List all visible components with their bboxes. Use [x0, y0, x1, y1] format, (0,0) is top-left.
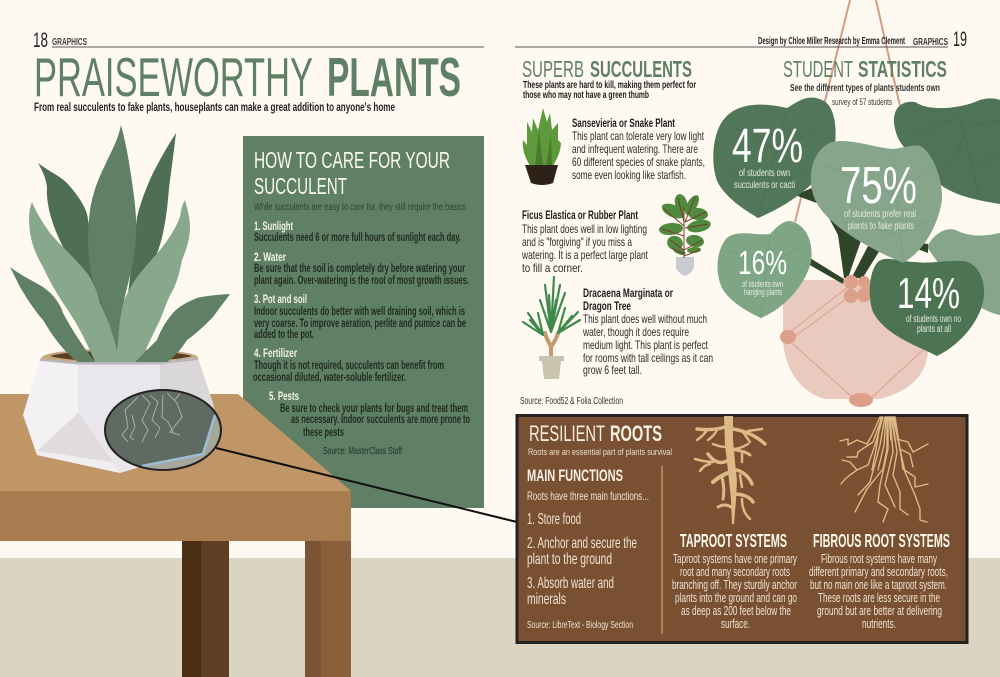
table — [0, 394, 351, 677]
leaf: 75 percent — [811, 141, 942, 263]
care tips: plant again. Over-watering is the root of most growth issues. — [254, 275, 469, 287]
text: dragon tree: medium light. This plant is perfect — [583, 338, 708, 352]
taproot systems: TAPROOT SYSTEMS — [680, 531, 787, 551]
left page header — [33, 29, 484, 52]
care tips: Be sure to check your plants for bugs and treat them — [280, 403, 468, 415]
right page header: Design by Chloe Miller Research by Emma Clement — [758, 36, 905, 47]
subtitle: From real succulents to fake plants, houseplants can make a great addition to anyone's home — [34, 102, 395, 114]
care tips: Though it is not required, succulents can benefit from — [254, 360, 444, 372]
leaf: 16 percent: of students own — [742, 279, 783, 289]
main functions — [527, 467, 649, 631]
succulents intro: These plants are hard to kill, making them perfect for — [523, 79, 696, 91]
main functions: minerals — [527, 591, 566, 608]
fibrous root systems: Fibrous root systems have many — [821, 552, 937, 566]
stems — [795, 188, 928, 284]
care tips: occasional diluted, water-soluble fertilizer. — [253, 372, 406, 384]
icon: dragon tree — [523, 277, 580, 379]
panel: how to care — [243, 136, 484, 508]
heading: student statistics: STUDENT — [783, 56, 853, 82]
right page hanging ropes — [795, 0, 902, 222]
text: snake plant: 60 different species of snake plants, — [572, 155, 705, 169]
text: dragon tree — [582, 288, 713, 377]
leaf: 47 percent: succulents or cacti — [734, 179, 795, 191]
care tips: 2. Water — [254, 252, 286, 264]
panel source: Source: MasterClass Staff — [323, 446, 402, 457]
main functions: plant to the ground — [527, 551, 612, 568]
taproot systems: branching off. They sturdily anchor — [672, 578, 797, 592]
icon: rubber plant — [659, 193, 712, 276]
heading: student statistics: STATISTICS — [858, 56, 947, 82]
text: dragon tree: This plant does well without much — [583, 312, 707, 326]
leaf: 16 percent — [717, 221, 812, 318]
care tips: 5. Pests — [269, 391, 299, 403]
text: dragon tree: water, though it does require — [582, 325, 689, 339]
care tips — [253, 221, 470, 439]
leaf: 75 percent: 75% — [840, 157, 917, 215]
text: snake plant: some even looking like starfish. — [572, 168, 686, 182]
left page header: GRAPHICS — [52, 37, 87, 48]
text: dragon tree: Dragon Tree — [583, 301, 631, 313]
roots heading: RESILIENT — [529, 421, 605, 446]
text: dragon tree: for rooms with tall ceilings as it can — [583, 351, 713, 365]
taproot systems: Taproot systems have one primary — [673, 552, 797, 566]
main functions: Roots have three main functions... — [527, 489, 649, 503]
roots heading: ROOTS — [610, 421, 662, 446]
heading: student statistics — [783, 56, 947, 82]
right page header — [515, 28, 967, 51]
heading: superb succulents: SUCCULENTS — [590, 56, 692, 82]
care tips: 4. Fertilizer — [254, 348, 297, 360]
leaf: 47 percent — [713, 97, 836, 218]
hanging plant illustration — [713, 97, 1000, 407]
taproot systems: as deep as 200 feet below the — [681, 604, 791, 618]
illustration: pot — [23, 349, 218, 473]
pot strings and knots — [780, 275, 923, 407]
heading: superb succulents: SUPERB — [522, 56, 584, 82]
text: rubber plant: Ficus Elastica or Rubber Plant — [522, 210, 638, 222]
panel heading — [254, 147, 450, 199]
pot — [783, 280, 928, 399]
fibrous root systems: ground but are better at delivering — [817, 604, 942, 618]
care tips: 1. Sunlight — [254, 221, 293, 233]
leaf: 14 percent — [870, 259, 984, 356]
main functions: MAIN FUNCTIONS — [527, 467, 623, 485]
icon: taproot — [695, 416, 765, 524]
succulents intro — [523, 79, 696, 101]
panel heading: HOW TO CARE FOR YOUR — [254, 147, 450, 173]
taproot systems: plants into the ground and can go — [675, 591, 797, 605]
leaf: top right — [894, 98, 1000, 204]
magnifier: roots in pot — [105, 390, 221, 470]
care tips: as necessary. Indoor succulents are more prone to — [291, 414, 470, 426]
taproot systems: root and many secondary roots — [680, 565, 790, 579]
statistics intro: survey of 57 students — [832, 97, 892, 108]
title: PLANTS — [327, 46, 461, 108]
text: rubber plant — [521, 210, 648, 275]
text: snake plant: and infrequent watering. There are — [572, 142, 698, 156]
panel: resilient roots — [517, 416, 967, 642]
title: PRAISEWORTHY — [34, 46, 313, 108]
care tips: these pests — [303, 427, 344, 439]
main functions: 3. Absorb water and — [527, 575, 614, 592]
leaf: lower right — [927, 229, 1000, 315]
right page header: 19 — [953, 28, 967, 51]
panel heading: SUCCULENT — [254, 173, 347, 199]
main functions: 2. Anchor and secure the — [527, 535, 637, 552]
source: succulents: Source: Food52 & Folia Collection — [520, 396, 623, 407]
main functions: Source: LibreText - Biology Section — [527, 620, 633, 631]
text: rubber plant: to fill a corner. — [522, 261, 583, 275]
statistics intro — [790, 82, 940, 108]
text: dragon tree: grow 6 feet tall. — [583, 363, 642, 377]
text: rubber plant: watering. It is a perfect large plant — [521, 248, 648, 262]
main functions: 1. Store food — [527, 511, 581, 528]
care tips: added to the pot. — [254, 329, 314, 341]
leaf: 47 percent: of students own — [739, 167, 790, 179]
care tips: 3. Pot and soil — [254, 294, 307, 306]
illustration: succulent leaves — [10, 125, 230, 362]
heading: superb succulents — [522, 56, 692, 82]
right page header: GRAPHICS — [913, 37, 948, 48]
leaf: 14 percent: 14% — [897, 269, 960, 318]
text: rubber plant: This plant does well in low lighting — [522, 222, 647, 236]
care tips: very coarse. To improve aeration, perlite and pumice can be — [254, 318, 466, 330]
taproot systems: surface. — [721, 617, 750, 631]
left page header: 18 — [33, 29, 48, 52]
fibrous root systems: nutrients. — [862, 617, 896, 631]
leaf: 14 percent: of students own no — [906, 314, 961, 325]
leaf: 75 percent: plants to fake plants — [848, 220, 914, 232]
text: dragon tree: Dracaena Marginata or — [583, 288, 673, 300]
care tips: Indoor succulents do better with well draining soil, which is — [254, 306, 465, 318]
text: snake plant — [572, 118, 705, 182]
taproot systems — [672, 531, 797, 631]
leaf: 75 percent: of students prefer real — [844, 208, 916, 220]
leaf: 47 percent: 47% — [732, 120, 803, 173]
leaf: 16 percent: 16% — [738, 244, 787, 281]
panel intro: While succulents are easy to care for, they still require the basics — [254, 202, 466, 213]
text: snake plant: Sansevieria or Snake Plant — [572, 118, 675, 130]
leaf: 16 percent: hanging plants — [744, 287, 782, 297]
leaf: 14 percent: plants at all — [917, 324, 951, 335]
fibrous root systems — [809, 531, 950, 631]
text: snake plant: This plant can tolerate very low light — [572, 129, 704, 143]
succulents intro: those who may not have a green thumb — [523, 89, 649, 101]
icon: fibrous root — [840, 417, 928, 522]
care tips: Succulents need 6 or more full hours of sunlight each day. — [254, 232, 461, 244]
care tips: Be sure that the soil is completely dry before watering your — [254, 263, 465, 275]
text: rubber plant: and is "forgiving" if you miss a — [522, 235, 632, 249]
roots intro: Roots are an essential part of plants survival — [528, 447, 672, 458]
pointer line to roots — [216, 448, 517, 522]
icon: snake plant — [523, 108, 561, 185]
